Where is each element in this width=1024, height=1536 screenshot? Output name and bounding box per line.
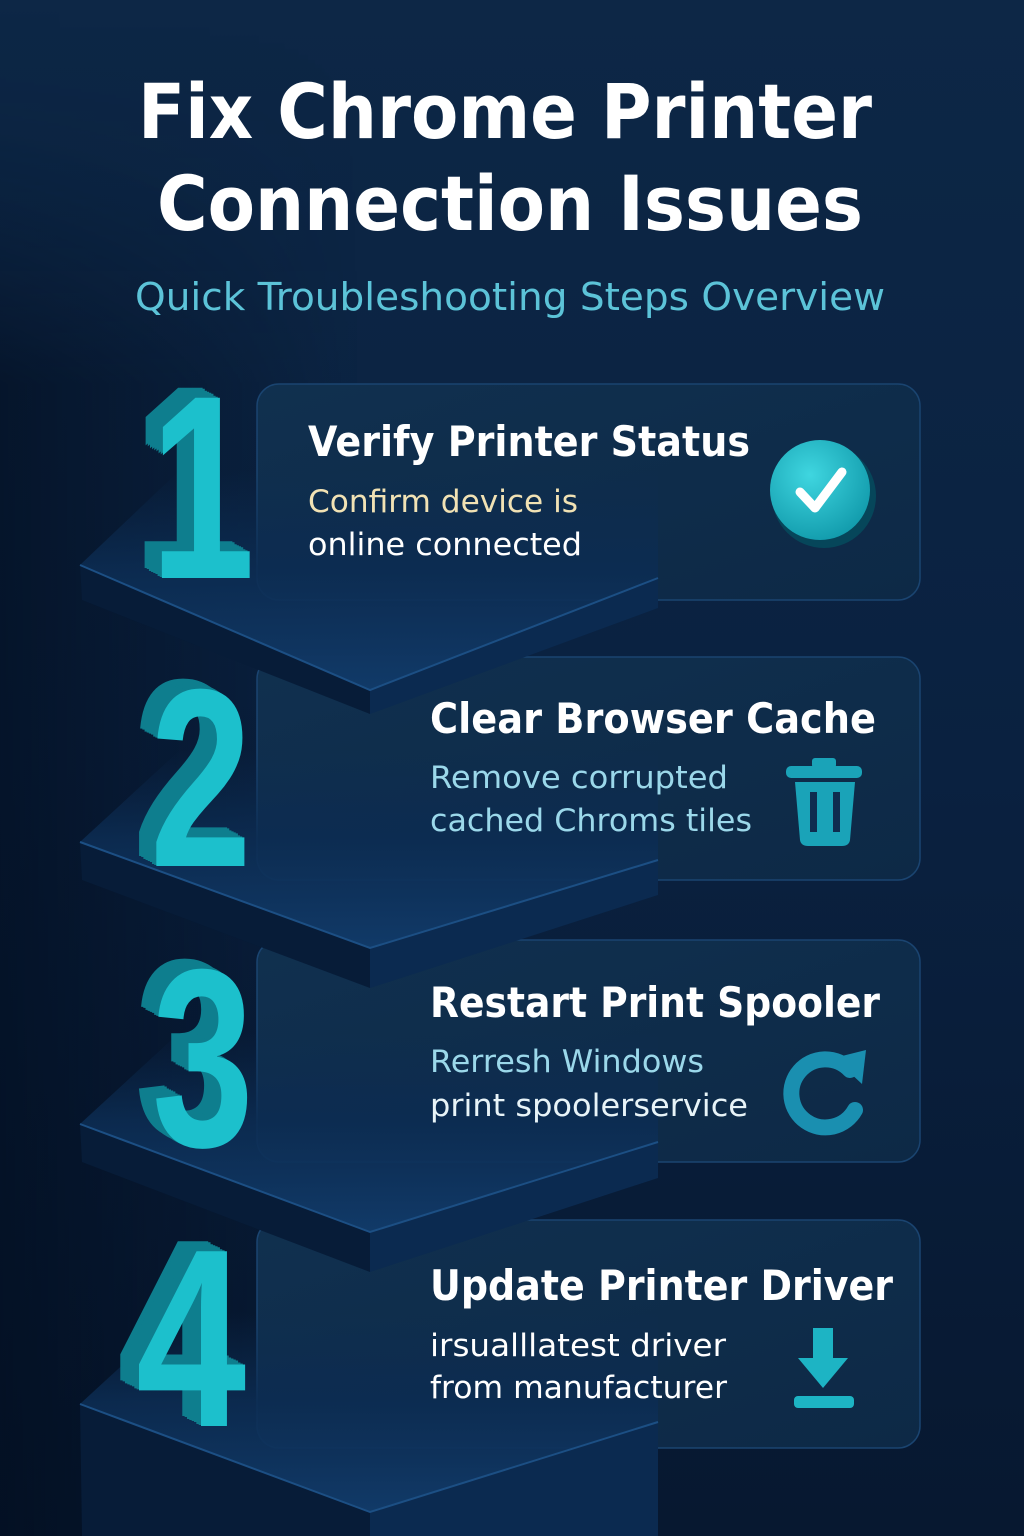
card: step 4 [257, 1220, 920, 1448]
text: step 4: Update Printer Driver [430, 1261, 893, 1310]
text: step 1: Confirm device is [308, 484, 578, 520]
number 3: 3 [141, 910, 243, 1194]
number 2: 2 [135, 627, 237, 911]
text: step 2: Remove corrupted [430, 760, 728, 796]
card: step 2 [257, 657, 920, 880]
number 4: 4 [134, 1196, 244, 1480]
number 3: 3 [139, 909, 241, 1193]
number 4: 4 [124, 1191, 234, 1475]
number 3: 3 [135, 906, 236, 1190]
number 3: 3 [143, 911, 245, 1195]
number 3: 3 [152, 916, 254, 1200]
subtitle: Quick Troubleshooting Steps Overview [135, 275, 885, 319]
icon: download [794, 1328, 854, 1408]
platform 3 [80, 1032, 658, 1272]
title: Fix Chrome Printer [138, 67, 872, 156]
platform 2 [80, 750, 658, 988]
icon: trash [786, 758, 862, 846]
number 4: 4 [131, 1195, 242, 1479]
title [138, 67, 872, 248]
number 3: 3 [148, 914, 249, 1198]
number 4: 4 [122, 1190, 232, 1474]
number 1: 1 [146, 340, 251, 632]
number 1: 1 [137, 335, 242, 627]
number 2: 2 [133, 626, 234, 910]
number 1: 1 [144, 338, 248, 630]
platform 4 [80, 1312, 658, 1536]
number 2: 2 [146, 634, 247, 918]
number 4: 4 [120, 1188, 230, 1472]
text: step 1: online connected [308, 527, 582, 563]
icon: refresh [791, 1050, 866, 1127]
number 1: 1 [133, 332, 238, 624]
text: step 3: print spoolerservice [430, 1088, 748, 1124]
text: step 3: Restart Print Spooler [430, 978, 880, 1027]
number 4: 4 [127, 1192, 237, 1476]
number 2: 2 [150, 636, 252, 920]
text: step 2: cached Chroms tiles [430, 803, 752, 839]
card: step 3 [257, 940, 920, 1162]
card: step 1 [257, 384, 920, 600]
text: step 3 [430, 978, 880, 1124]
number 1: 1 [139, 336, 244, 628]
number 2: 2 [148, 635, 250, 919]
text: step 4 [430, 1261, 893, 1406]
number 1: 1 [141, 337, 246, 629]
text: step 2 [430, 694, 876, 839]
number 3: 3 [146, 912, 247, 1196]
number 1: 1 [148, 341, 253, 633]
number 3: 3 [137, 907, 239, 1191]
number 4: 4 [117, 1187, 227, 1471]
text: step 3: Rerresh Windows [430, 1044, 704, 1080]
number 2: 2 [139, 630, 241, 914]
text: step 2: Clear Browser Cache [430, 694, 876, 743]
number 2: 2 [144, 632, 245, 916]
text: step 4: irsualllatest driver [430, 1328, 726, 1364]
icon: check circle [770, 440, 876, 548]
text: step 1 [308, 417, 750, 563]
number 3: 3 [150, 915, 252, 1199]
number 2: 2 [141, 631, 243, 915]
number 1: 1 [135, 333, 240, 625]
platform 1 [80, 470, 658, 714]
number 1: 1 [150, 342, 255, 634]
number 4: 4 [136, 1197, 246, 1481]
title: Connection Issues [157, 159, 863, 248]
number 4: 4 [129, 1193, 239, 1477]
number 2: 2 [137, 629, 239, 913]
text: step 1: Verify Printer Status [308, 417, 750, 466]
text: step 4: from manufacturer [430, 1370, 727, 1406]
